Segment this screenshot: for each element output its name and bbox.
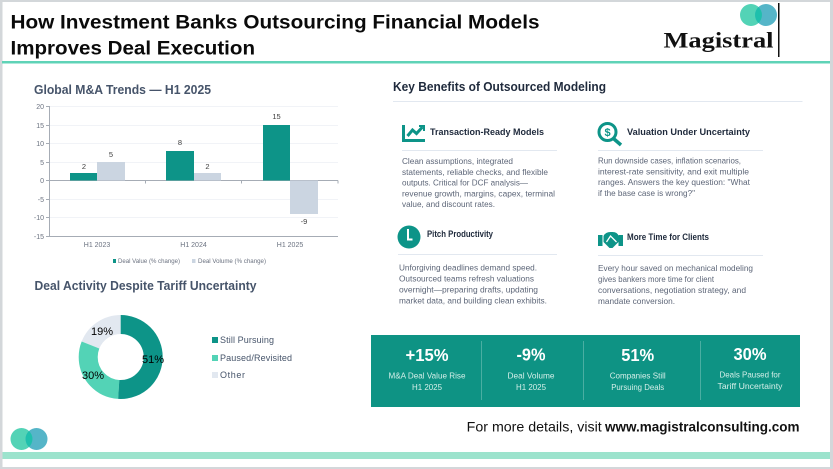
icon: magnifier with dollar — [599, 124, 621, 145]
card: Valuation Under Uncertainty: Valuation Under Uncertainty — [627, 127, 750, 137]
icon: handshake — [598, 232, 623, 248]
icon: magnifier with dollar: $ — [604, 127, 611, 139]
logo: Magistral: Magistral — [664, 28, 774, 53]
card: Transaction-Ready Models — [402, 125, 557, 209]
KPI: deal value: M&A Deal Value Rise — [388, 371, 466, 381]
card: Valuation Under Uncertainty: if the base case is wrong?" — [598, 188, 695, 198]
bar chart: Global M&A trends: 2 — [82, 162, 86, 171]
logo: Magistral — [664, 3, 780, 57]
card: Valuation Under Uncertainty — [598, 124, 763, 198]
bar chart: Global M&A trends: 8 — [178, 138, 182, 147]
card: More Time for Clients: More Time for Clients — [627, 232, 709, 242]
donut legend: Paused/Revisited — [220, 353, 292, 363]
heading: Deal Activity: Deal Activity Despite Tariff Uncertainty — [34, 278, 257, 293]
KPI: deal volume: -9% — [516, 344, 546, 364]
bar chart: Global M&A trends: -15 — [34, 234, 44, 241]
card: Pitch Productivity: Outsourced teams refresh valuations — [399, 274, 534, 284]
bar chart: Global M&A trends: 15 — [36, 123, 44, 130]
chart legend: Deal Value (% change) — [118, 258, 180, 265]
donut chart: deal activity: 19% — [91, 326, 113, 338]
donut chart: deal activity — [82, 324, 164, 390]
KPI: deal value: +15% — [406, 345, 449, 365]
KPI: paused: Tariff Uncertainty — [718, 381, 783, 391]
title: Improves Deal Execution — [10, 38, 255, 60]
card: Pitch Productivity — [398, 226, 557, 306]
heading: Key Benefits: Key Benefits of Outsourced Modeling — [393, 79, 606, 94]
title — [10, 12, 540, 60]
bar chart: Global M&A trends: H1 2024 — [180, 242, 207, 249]
bar chart: Global M&A trends: -5 — [38, 197, 44, 204]
KPI: still pursuing: Companies Still — [610, 371, 666, 381]
footer logo circles — [10, 428, 48, 450]
card: More Time for Clients: conversations, negotiation strategy, and — [598, 285, 746, 295]
donut chart: deal activity: 51% — [142, 354, 164, 366]
KPI band — [371, 335, 800, 407]
KPI: deal value — [388, 345, 466, 392]
KPI: still pursuing — [610, 345, 666, 392]
donut chart: deal activity: 30% — [82, 370, 104, 382]
bar chart: Global M&A trends: -9 — [301, 217, 307, 226]
KPI: deal volume: Deal Volume — [508, 371, 555, 381]
donut legend: Still Pursuing — [220, 335, 274, 345]
card: Valuation Under Uncertainty: ranges. Answers the key question: "What — [598, 177, 751, 187]
card: More Time for Clients: Every hour saved on mechanical modeling — [598, 263, 753, 273]
KPI: deal volume: H1 2025 — [516, 382, 546, 392]
KPI: paused: 30% — [734, 344, 767, 364]
KPI: paused: Deals Paused for — [720, 370, 781, 380]
bar chart: Global M&A trends: 15 — [272, 112, 281, 121]
card: Transaction-Ready Models: statements, reliable checks, and flexible — [402, 167, 548, 177]
bar chart: Global M&A trends: 10 — [36, 141, 44, 148]
card: Pitch Productivity: overnight—preparing drafts, updating — [399, 284, 538, 294]
heading: Global M&A Trends: Global M&A Trends — H1 2025 — [34, 82, 211, 97]
card: Valuation Under Uncertainty: interest-rate sensitivity, and exit multiple — [598, 166, 749, 176]
donut legend — [212, 335, 292, 380]
card: More Time for Clients — [598, 232, 763, 306]
card: Pitch Productivity: Pitch Productivity — [427, 229, 493, 239]
icon: line chart — [404, 125, 425, 140]
card: Pitch Productivity: Unforgiving deadlines demand speed. — [399, 262, 537, 272]
KPI: deal value: H1 2025 — [412, 382, 442, 392]
bar chart: Global M&A trends — [34, 104, 338, 265]
card: Transaction-Ready Models: Clean assumptions, integrated — [402, 156, 513, 166]
chart legend — [113, 258, 266, 265]
donut legend: Other — [220, 370, 245, 380]
bar chart: Global M&A trends: -10 — [34, 215, 44, 222]
card: Transaction-Ready Models: outputs. Critical for DCF analysis— — [402, 178, 528, 188]
card: More Time for Clients: gives bankers more time for client — [598, 274, 715, 284]
chart legend: Deal Volume (% change) — [198, 258, 266, 265]
KPI: paused — [718, 344, 783, 391]
card: Transaction-Ready Models: value, and discount rates. — [402, 199, 495, 209]
bar chart: Global M&A trends: H1 2025 — [277, 242, 303, 249]
bar chart: Global M&A trends: 20 — [36, 104, 44, 111]
KPI: still pursuing: Pursuing Deals — [611, 382, 664, 392]
title: How Investment Banks Outsourcing Financial Models — [10, 12, 540, 34]
KPI: still pursuing: 51% — [621, 345, 655, 365]
bar chart: Global M&A trends: 5 — [109, 150, 113, 159]
footer link text: www.magistralconsulting.com — [604, 419, 800, 435]
bar chart: Global M&A trends: H1 2023 — [84, 242, 110, 249]
bar chart: Global M&A trends: 2 — [205, 162, 210, 171]
bar chart: Global M&A trends: 5 — [40, 160, 44, 167]
card: Pitch Productivity: market data, and building clean exhibits. — [399, 296, 547, 306]
icon: clock — [398, 226, 420, 248]
footer link text: For more details, visit — [467, 419, 602, 435]
KPI: deal volume — [508, 344, 555, 392]
card: More Time for Clients: mandate conversion. — [598, 296, 675, 306]
card: Valuation Under Uncertainty: Run downside cases, inflation scenarios, — [598, 156, 741, 166]
footer band — [2, 452, 830, 459]
card: Transaction-Ready Models: revenue growth, margins, capex, terminal — [402, 188, 555, 198]
card: Transaction-Ready Models: Transaction-Ready Models — [430, 127, 544, 137]
bar chart: Global M&A trends: 0 — [40, 178, 44, 185]
footer link text — [467, 419, 800, 435]
